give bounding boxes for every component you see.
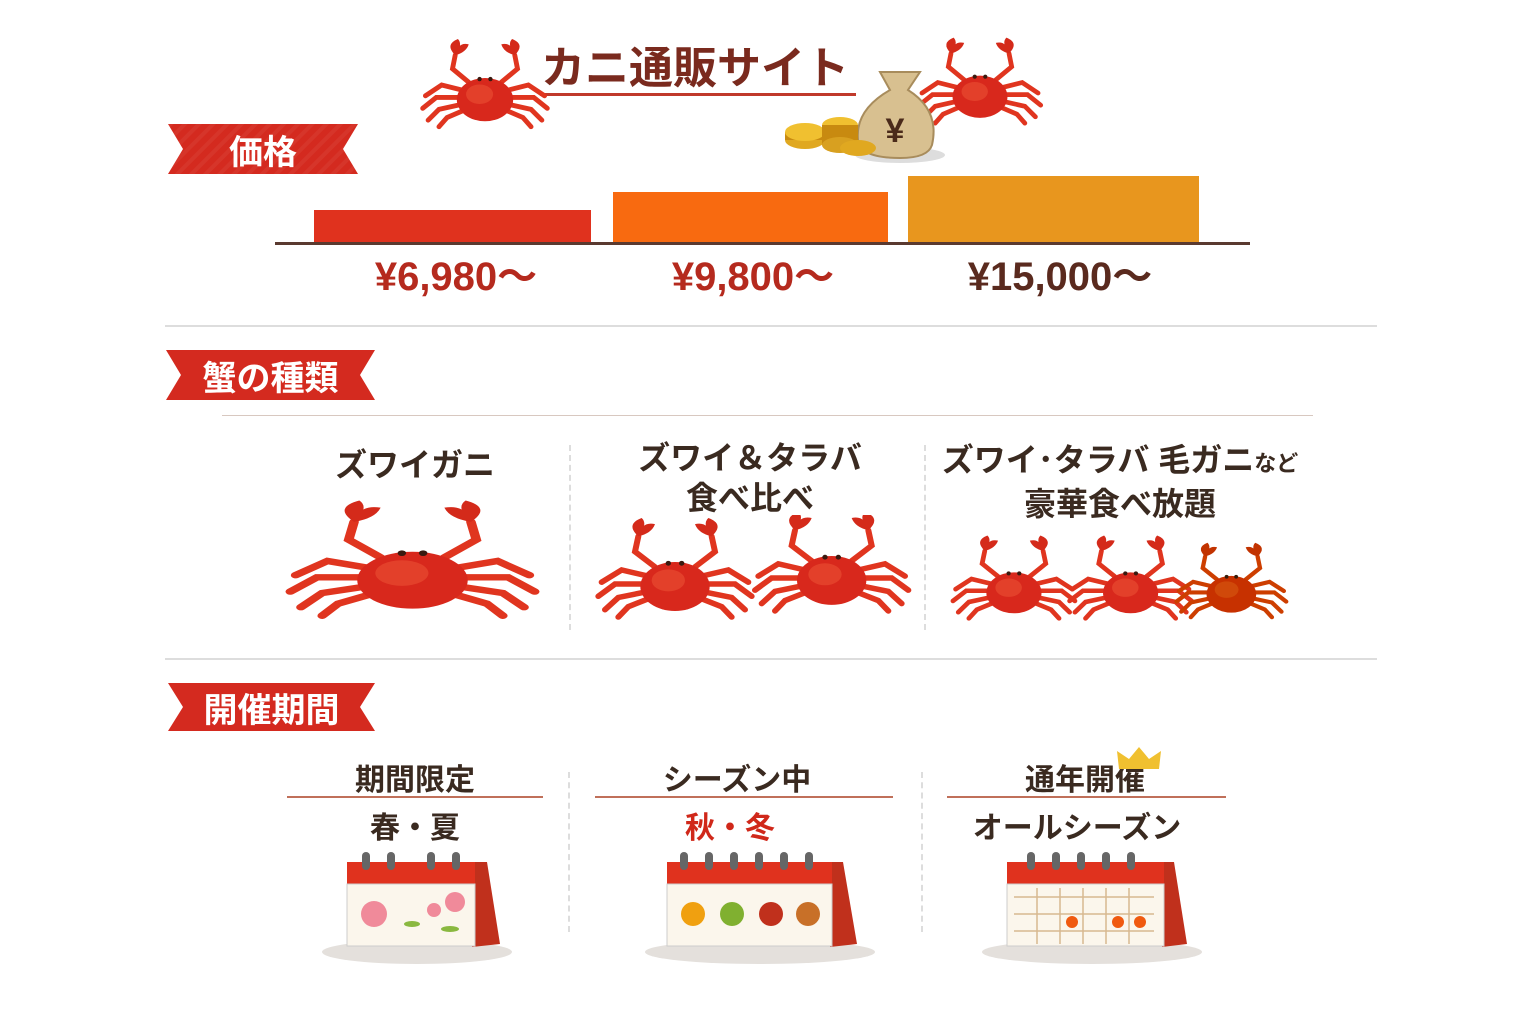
- ribbon: 開催期間: 開催期間: [204, 692, 340, 730]
- ribbon: 蟹の種類: 蟹の種類: [202, 360, 338, 398]
- panel: ズワイ＆タラバ: [595, 440, 912, 620]
- bar 1: [314, 210, 591, 243]
- price label 1: ¥6,980～: [375, 255, 537, 299]
- ribbon: 価格: [168, 124, 358, 174]
- heading: 通年開催: [1025, 764, 1145, 797]
- heading: [942, 442, 1298, 522]
- title: カニ通販サイト: [541, 44, 849, 93]
- panel: 食べ放題: [942, 442, 1298, 621]
- heading: シーズン中: [663, 764, 811, 797]
- divider dashed: [569, 445, 571, 630]
- baseline: [275, 242, 1250, 245]
- heading: [638, 440, 862, 516]
- panel: 期間限定: [287, 764, 543, 964]
- icon: crab left: [420, 39, 550, 130]
- sub text: オールシーズン: [973, 812, 1181, 845]
- heading: ズワイ＆タラバ: [638, 440, 862, 476]
- heading: ズワイガニ: [335, 447, 495, 483]
- icon: calendar leaves: [645, 852, 875, 964]
- price label 2: ¥9,800～: [672, 255, 834, 299]
- icon: calendar flowers: [322, 852, 512, 964]
- panel: ズワイガニ: [286, 447, 540, 619]
- heading: 期間限定: [355, 764, 475, 797]
- icon: calendar grid hearts: [982, 852, 1202, 964]
- price label 3: ¥15,000～: [968, 255, 1152, 299]
- sub text: 春・夏: [370, 812, 460, 845]
- icon: money bag and coins: [785, 71, 945, 163]
- heading: 食べ比べ: [686, 480, 814, 516]
- sub text: 秋・冬: [685, 812, 775, 845]
- ribbon: 蟹の種類: [166, 350, 375, 400]
- panel: シーズン中: [595, 764, 893, 964]
- icon: three crabs: [950, 536, 1288, 621]
- ribbon: 開催期間: [168, 683, 375, 731]
- panel: 通年開催: [947, 747, 1226, 964]
- icon: crab: [286, 500, 540, 619]
- icon: crown: [1117, 747, 1161, 769]
- title underline: [540, 93, 856, 96]
- heading: ズワイ･タラバ 毛ガニなど: [942, 442, 1298, 478]
- icon: crab right: [920, 38, 1044, 126]
- bar 3: [908, 176, 1199, 243]
- icon: money bag and coins: ¥: [886, 112, 905, 150]
- icon: two crabs: [595, 515, 912, 620]
- bar 2: [613, 192, 888, 243]
- heading: 豪華食べ放題: [1024, 486, 1216, 522]
- bar chart: price: [275, 176, 1250, 245]
- ribbon: 価格: 価格: [229, 134, 297, 172]
